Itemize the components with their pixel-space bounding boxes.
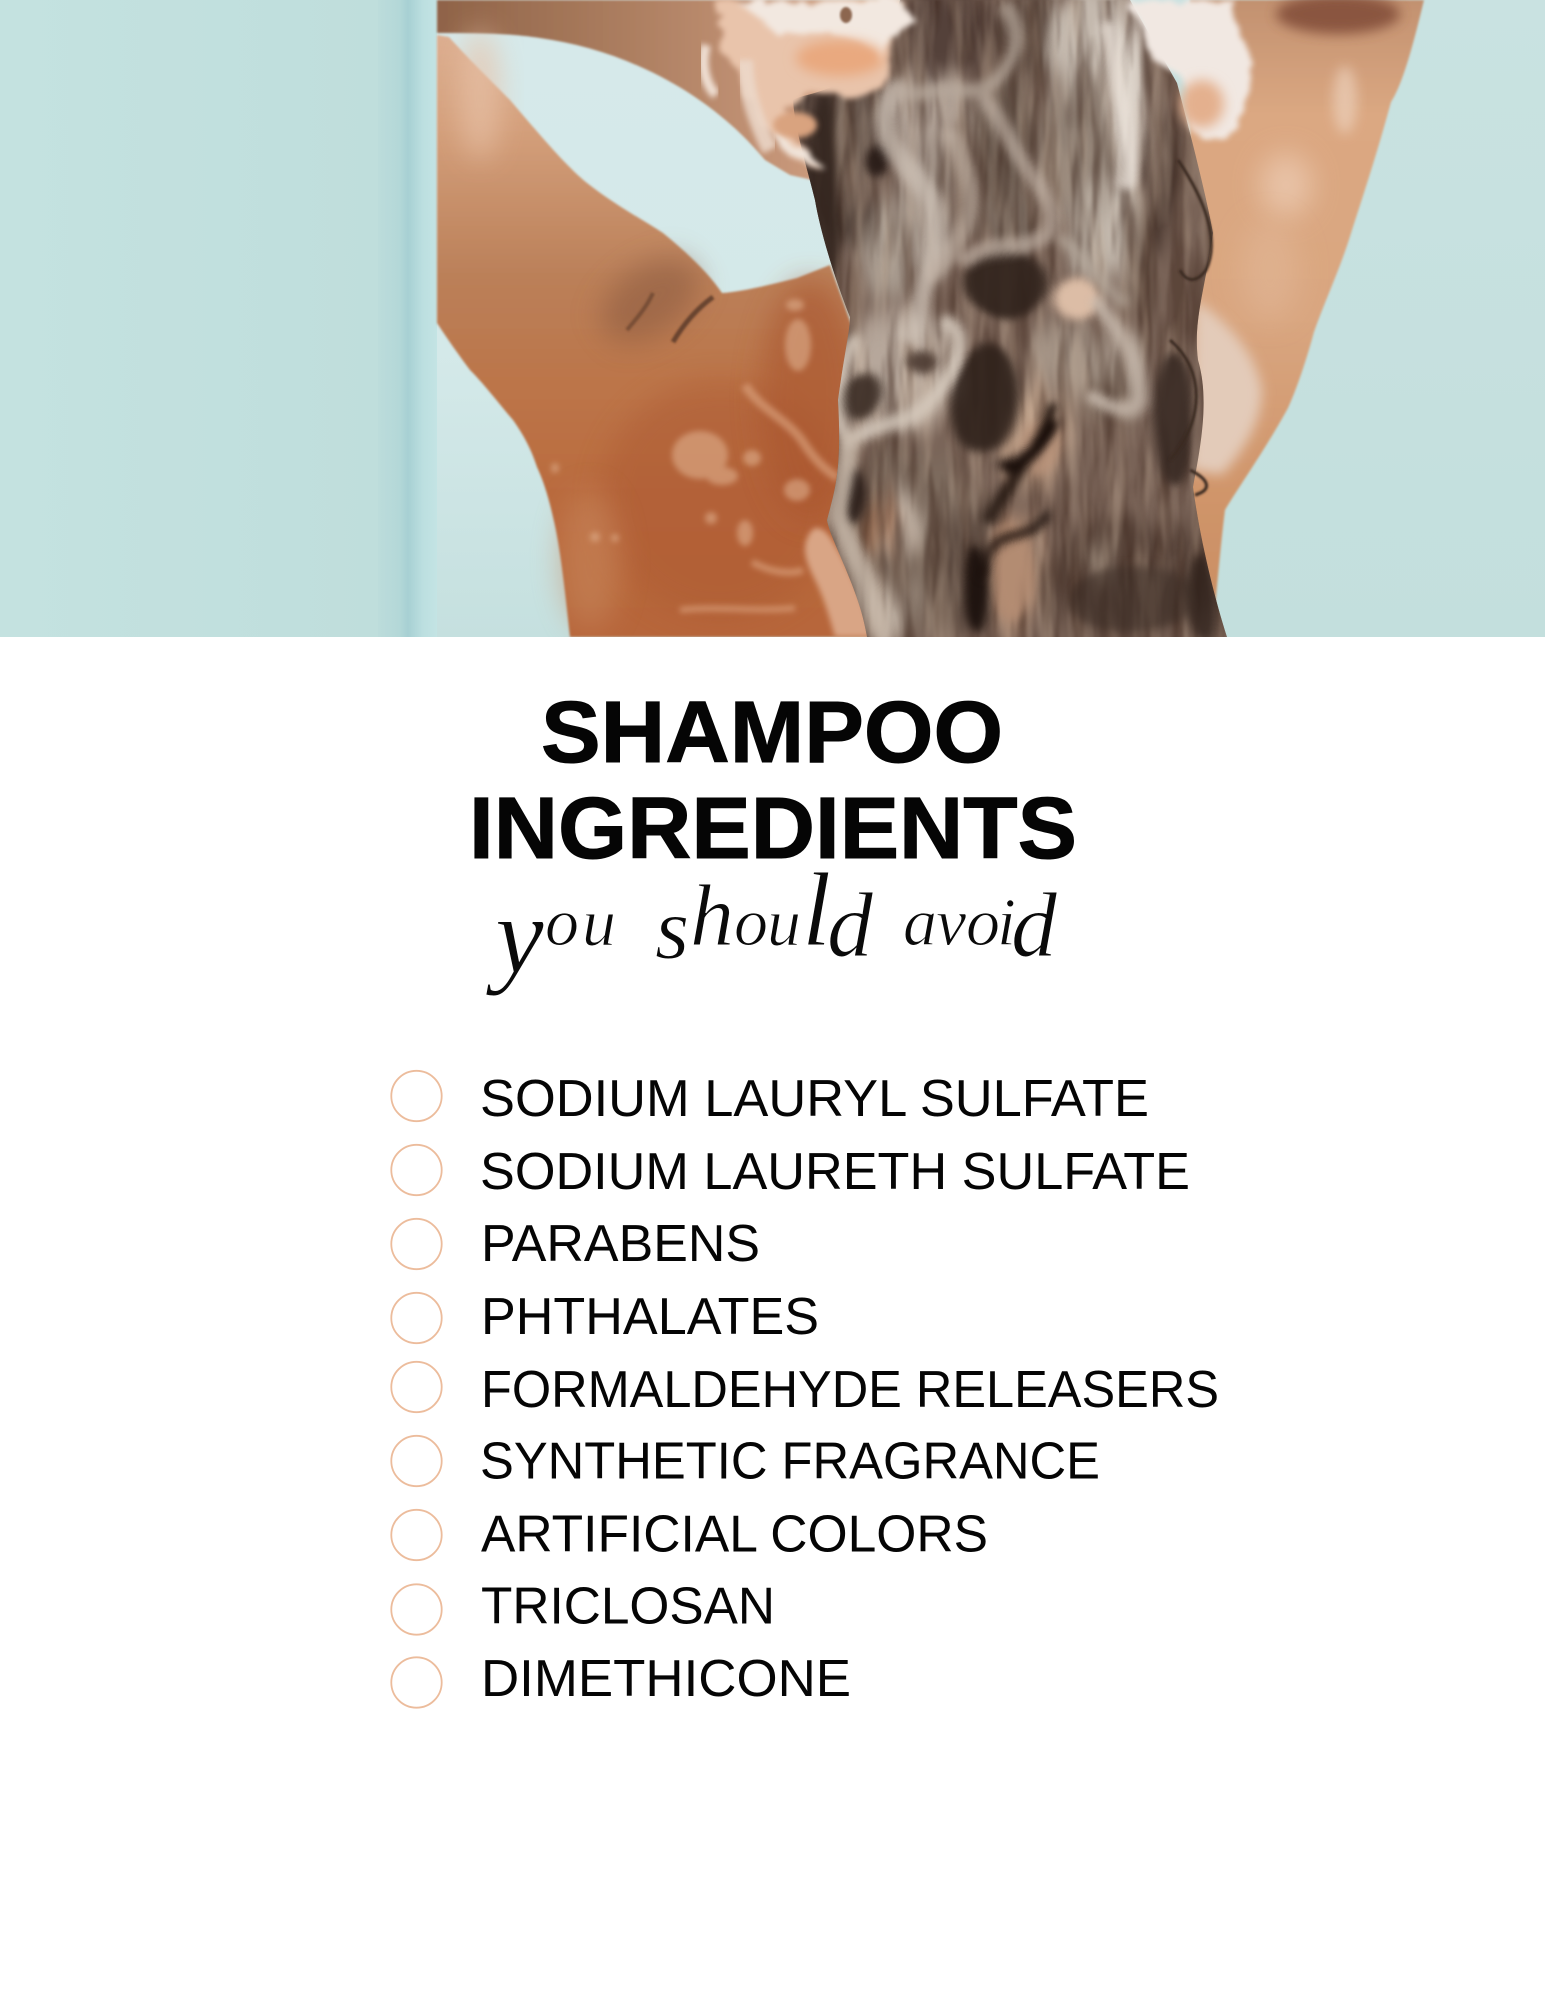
script subtitle: v (936, 884, 967, 960)
lather on head and hand (704, 0, 1248, 172)
script subtitle: y (485, 874, 544, 996)
item: artificial colors: ARTIFICIAL COLORS (481, 1506, 988, 1564)
script subtitle: a (903, 884, 937, 960)
script subtitle: o (734, 884, 768, 960)
item: sodium laureth sulfate: SODIUM LAURETH SULFATE (480, 1143, 1190, 1201)
script subtitle: l (802, 851, 831, 968)
ingredient checklist (391, 1070, 1219, 1708)
script subtitle: d (827, 874, 874, 976)
item: phthalates: PHTHALATES (481, 1288, 819, 1346)
heading: SHAMPOO: SHAMPOO (541, 684, 1003, 781)
script subtitle: o (545, 884, 579, 960)
heading: INGREDIENTS: INGREDIENTS (469, 780, 1077, 877)
script subtitle: h (690, 868, 734, 965)
title (469, 684, 1077, 877)
shower wall panels (0, 0, 1545, 637)
suds along right side of back (1190, 300, 1262, 475)
script subtitle: s (655, 881, 689, 978)
soap suds on back (551, 299, 872, 637)
script subtitle: u (767, 884, 801, 960)
script subtitle: u (582, 884, 616, 960)
item: parabens: PARABENS (481, 1215, 760, 1273)
item: formaldehyde releasers: FORMALDEHYDE RELEASERS (481, 1361, 1219, 1419)
vertical hair streak texture (814, 0, 1226, 637)
foam ribbons and dark strands (837, 10, 1140, 637)
dark gaps and peach skin showing through hair (806, 90, 1216, 640)
item: dimethicone: DIMETHICONE (481, 1650, 851, 1708)
curly dark tendrils (1170, 160, 1211, 495)
long lathered hair (793, 0, 1227, 637)
item: synthetic fragrance: SYNTHETIC FRAGRANCE (480, 1432, 1100, 1490)
left arm and back (437, 0, 960, 637)
hair colour masses (793, 0, 1227, 637)
script subtitle: d (1011, 874, 1058, 976)
photo: woman shampooing long hair in shower (0, 0, 1545, 637)
script subtitle: i (997, 884, 1016, 960)
right arm (1190, 0, 1424, 637)
item: triclosan: TRICLOSAN (481, 1578, 775, 1636)
item: sodium lauryl sulfate: SODIUM LAURYL SULFATE (480, 1070, 1149, 1128)
script subtitle: o (966, 884, 1000, 960)
